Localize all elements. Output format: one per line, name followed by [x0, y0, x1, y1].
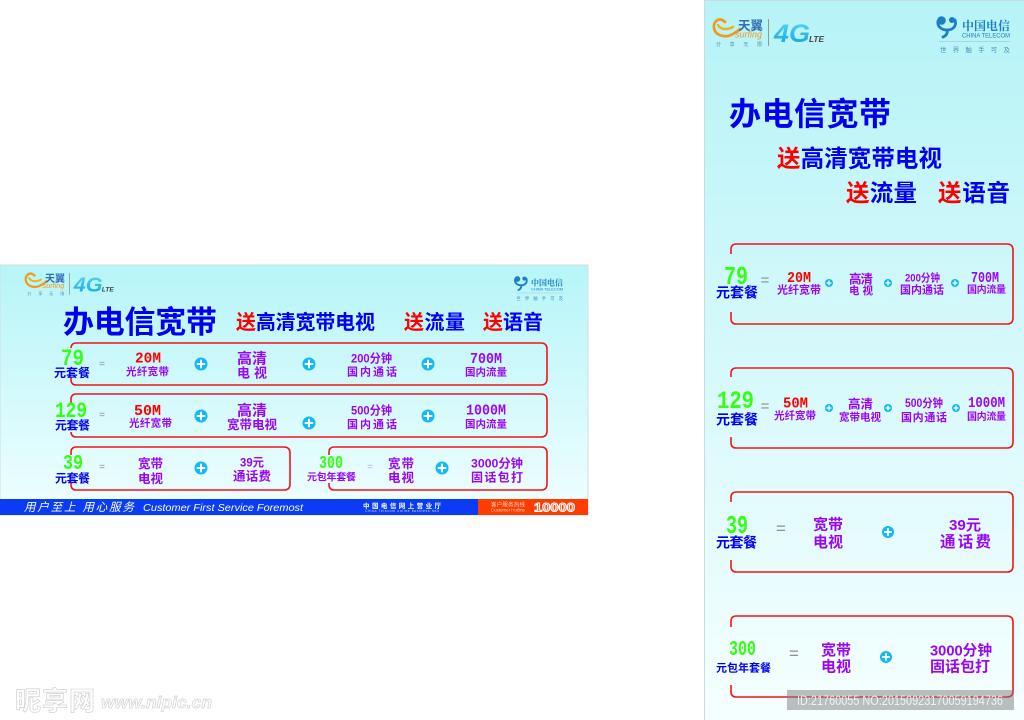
logo: Surfing 4G LTE: 4G: [773, 20, 810, 48]
item: 700M data: [967, 270, 1006, 296]
price: 129: [716, 387, 758, 428]
equals sign: =: [367, 462, 373, 473]
item: 50M fibre: 光纤宽带: [774, 409, 816, 422]
item: 50M fibre: [774, 396, 816, 422]
heading: free voice: 送语音: [483, 310, 543, 334]
logo: Surfing 4G LTE: [26, 273, 115, 297]
item: 500 minutes: [347, 402, 397, 431]
icon: plus: [194, 462, 208, 474]
equals sign: =: [761, 398, 770, 415]
item: HD TV: [849, 272, 874, 297]
item: broadband TV: 宽带: [821, 641, 851, 659]
item: 39 yuan call credit: [233, 456, 271, 484]
icon: plus: [422, 410, 434, 422]
footer slogan: 用户至上 用心服务: [24, 501, 136, 514]
item: 500 minutes: [901, 396, 947, 424]
price: 79: 79: [724, 262, 748, 292]
price: 300: 元包年套餐: [307, 470, 356, 484]
item: broadband TV: [821, 641, 851, 676]
heading: free HD TV: 送高清宽带电视: [777, 146, 942, 172]
item: 500 minutes: 500分钟: [351, 402, 392, 418]
item: 1000M data: [465, 402, 508, 430]
item: 200 minutes: [900, 270, 944, 296]
item: 50M fibre: 光纤宽带: [129, 416, 172, 430]
icon: plus: [952, 404, 960, 412]
item: broadband TV: 宽带: [388, 456, 414, 471]
footer: online hall: [363, 501, 442, 513]
package row: 39: [716, 492, 1013, 572]
logo: Surfing 4G LTE: LTE: [809, 35, 825, 44]
footer bar: [0, 499, 588, 515]
package row: 300: [716, 616, 1013, 697]
item: 39 yuan call credit: [940, 517, 991, 551]
equals sign: =: [99, 462, 105, 473]
logo: China Telecom: [515, 276, 564, 302]
logo: China Telecom: CHINA TELECOM: [531, 286, 563, 291]
item: broadband TV: 宽带: [138, 456, 163, 471]
equals sign: =: [761, 272, 770, 289]
panel: horizontal poster: [0, 265, 588, 515]
logo: Surfing 4G LTE: 4G: [73, 275, 103, 297]
price: 79: [54, 346, 90, 380]
item: 3000 minutes landline: [471, 456, 523, 484]
item: HD TV: 电视: [237, 366, 267, 380]
price: 129: 元套餐: [716, 412, 758, 428]
item: 200 minutes: 200分钟: [905, 270, 940, 284]
icon: plus: [422, 358, 434, 370]
item: HD broadband TV: 宽带电视: [227, 417, 277, 432]
icon: plus: [882, 526, 894, 538]
item: HD TV: 高清: [849, 272, 873, 286]
icon: plus: [951, 279, 959, 287]
icon: plus: [194, 410, 208, 422]
logo: Surfing 4G LTE: 天翼: [738, 19, 763, 33]
item: 700M data: 700M: [971, 270, 999, 287]
price: 79: [716, 262, 758, 300]
logo: China Telecom: 中国电信: [531, 277, 563, 288]
item: 200 minutes: 国内通话: [900, 282, 944, 296]
logo: China Telecom: 世界触手可及: [940, 45, 1010, 54]
logo: China Telecom: [937, 16, 1010, 54]
item: HD broadband TV: [227, 402, 277, 432]
icon: plus: [880, 651, 892, 663]
item: 20M fibre: 光纤宽带: [777, 282, 821, 296]
heading: free HD TV: 送高清宽带电视: [236, 310, 375, 334]
item: 200 minutes: 200分钟: [351, 350, 392, 366]
item: 20M fibre: 20M: [787, 270, 811, 287]
item: 700M data: 700M: [470, 351, 502, 368]
item: 3000 minutes landline: 固话包打: [930, 658, 990, 676]
icon: plus: [194, 358, 208, 370]
item: 3000 minutes landline: 3000分钟: [930, 642, 992, 660]
item: 39 yuan call credit: 39元: [240, 456, 264, 470]
logo: Surfing 4G LTE: 分享无限: [27, 290, 64, 296]
item: HD broadband TV: 高清: [237, 402, 267, 420]
item: 3000 minutes landline: [930, 642, 992, 676]
icon: plus: [825, 279, 833, 287]
footer: hotline: [491, 500, 575, 514]
item: HD TV: [237, 350, 267, 380]
item: 50M fibre: 50M: [783, 396, 808, 412]
item: 1000M data: 1000M: [968, 395, 1005, 412]
panel: vertical poster: [704, 0, 1024, 720]
heading: free voice: 送语音: [938, 180, 1010, 206]
price: 79: 79: [61, 346, 84, 372]
logo: Surfing 4G LTE: 天翼: [45, 273, 65, 285]
package row: 300: [307, 447, 547, 490]
item: 20M fibre: [777, 270, 821, 296]
footer: online hall: China Telecom online business hall: [365, 509, 439, 513]
equals sign: =: [99, 359, 105, 370]
watermark: site logo: [15, 686, 212, 716]
price: 300: 300: [319, 454, 343, 474]
icon: plus: [884, 404, 892, 412]
item: 20M fibre: 光纤宽带: [126, 365, 169, 378]
item: 500 minutes: 国内通话: [347, 417, 397, 431]
package row: 79: [54, 343, 547, 385]
title: main heading: 办电信宽带: [63, 305, 217, 340]
price: 129: [55, 399, 90, 432]
package row: 39: [55, 447, 290, 490]
item: broadband TV: 电视: [388, 471, 414, 485]
item: 3000 minutes landline: 固话包打: [471, 470, 523, 484]
logo: China Telecom: 世界触手可及: [516, 295, 564, 302]
logo: Surfing 4G LTE: [714, 19, 825, 48]
item: HD broadband TV: 宽带电视: [839, 410, 882, 424]
icon: plus: [436, 462, 448, 474]
item: 1000M data: 国内流量: [465, 418, 508, 430]
item: HD broadband TV: 高清: [848, 396, 873, 412]
price: 129: 元套餐: [55, 418, 90, 432]
item: 1000M data: 国内流量: [967, 410, 1006, 423]
item: 39 yuan call credit: 通话费: [940, 533, 991, 551]
item: broadband TV: [813, 516, 843, 551]
heading: free data: 送流量: [846, 180, 917, 206]
price: 39: [55, 453, 90, 486]
package row: 79: [716, 244, 1013, 324]
logo: Surfing 4G LTE: 分享无限: [716, 41, 762, 48]
item: HD TV: 高清: [237, 350, 267, 368]
logo: Surfing 4G LTE: LTE: [102, 287, 115, 294]
item: 20M fibre: 20M: [135, 350, 161, 368]
package row: 129: [55, 394, 547, 437]
footer slogan: English: Customer First Service Foremost: [143, 503, 304, 514]
item: 50M fibre: [129, 403, 172, 430]
item: 1000M data: 1000M: [466, 402, 506, 420]
logo: China Telecom: 中国电信: [962, 17, 1010, 34]
icon: plus: [302, 416, 316, 430]
item: 1000M data: [967, 395, 1006, 423]
item: broadband TV: 宽带: [813, 516, 843, 534]
price: 300: [716, 639, 771, 674]
footer: hotline: Customer Hotline: [491, 508, 525, 512]
item: HD broadband TV: [839, 396, 882, 424]
footer: online hall: 中国电信网上营业厅: [363, 501, 442, 510]
equals sign: =: [776, 519, 786, 538]
item: broadband TV: 电视: [813, 534, 843, 551]
icon: plus: [884, 279, 892, 287]
item: broadband TV: 电视: [821, 658, 851, 676]
item: 200 minutes: [347, 350, 397, 378]
footer: hotline: 客户服务热线: [491, 500, 525, 508]
icon: plus: [302, 358, 316, 370]
title: main heading: 办电信宽带: [729, 96, 891, 132]
footer: hotline: 10000: [534, 500, 575, 514]
item: 39 yuan call credit: 39元: [949, 517, 981, 534]
item: 50M fibre: 50M: [134, 403, 161, 420]
item: 39 yuan call credit: 通话费: [233, 468, 271, 484]
item: 500 minutes: 国内通话: [901, 410, 947, 424]
price: 300: [307, 454, 356, 484]
price: 129: 129: [717, 387, 754, 416]
item: 20M fibre: [126, 350, 169, 378]
price: 79: 元套餐: [54, 365, 90, 380]
price: 300: 元包年套餐: [716, 660, 771, 674]
item: broadband TV: [138, 456, 163, 486]
price: 39: 元套餐: [716, 534, 757, 550]
price: 300: 300: [729, 639, 756, 662]
equals sign: =: [99, 410, 105, 421]
price: 129: 129: [55, 399, 87, 424]
logo: China Telecom: CHINA TELECOM: [962, 34, 1010, 40]
item: 700M data: [465, 351, 508, 378]
item: HD TV: 电视: [849, 284, 874, 297]
item: 500 minutes: 500分钟: [905, 396, 943, 410]
price: 39: [716, 511, 757, 550]
equals sign: =: [789, 644, 799, 663]
item: 3000 minutes landline: 3000分钟: [471, 456, 523, 470]
package row: 129: [716, 368, 1013, 448]
logo: Surfing 4G LTE: surfing: [735, 30, 762, 40]
item: 700M data: 国内流量: [465, 366, 508, 378]
icon: plus: [825, 404, 833, 412]
watermark: site logo: 昵享网: [15, 686, 95, 716]
item: broadband TV: 电视: [138, 472, 163, 486]
price: 79: 元套餐: [716, 284, 758, 300]
item: broadband TV: [388, 456, 414, 485]
price: 39: 39: [63, 453, 83, 476]
item: 200 minutes: 国内通话: [347, 364, 397, 378]
watermark: site logo: www.nipic.cn: [101, 693, 212, 712]
price: 39: 元套餐: [55, 470, 90, 486]
heading: free data: 送流量: [404, 311, 465, 334]
price: 39: 39: [726, 511, 748, 541]
logo: Surfing 4G LTE: surfing: [43, 281, 64, 290]
item: 700M data: 国内流量: [967, 283, 1006, 296]
